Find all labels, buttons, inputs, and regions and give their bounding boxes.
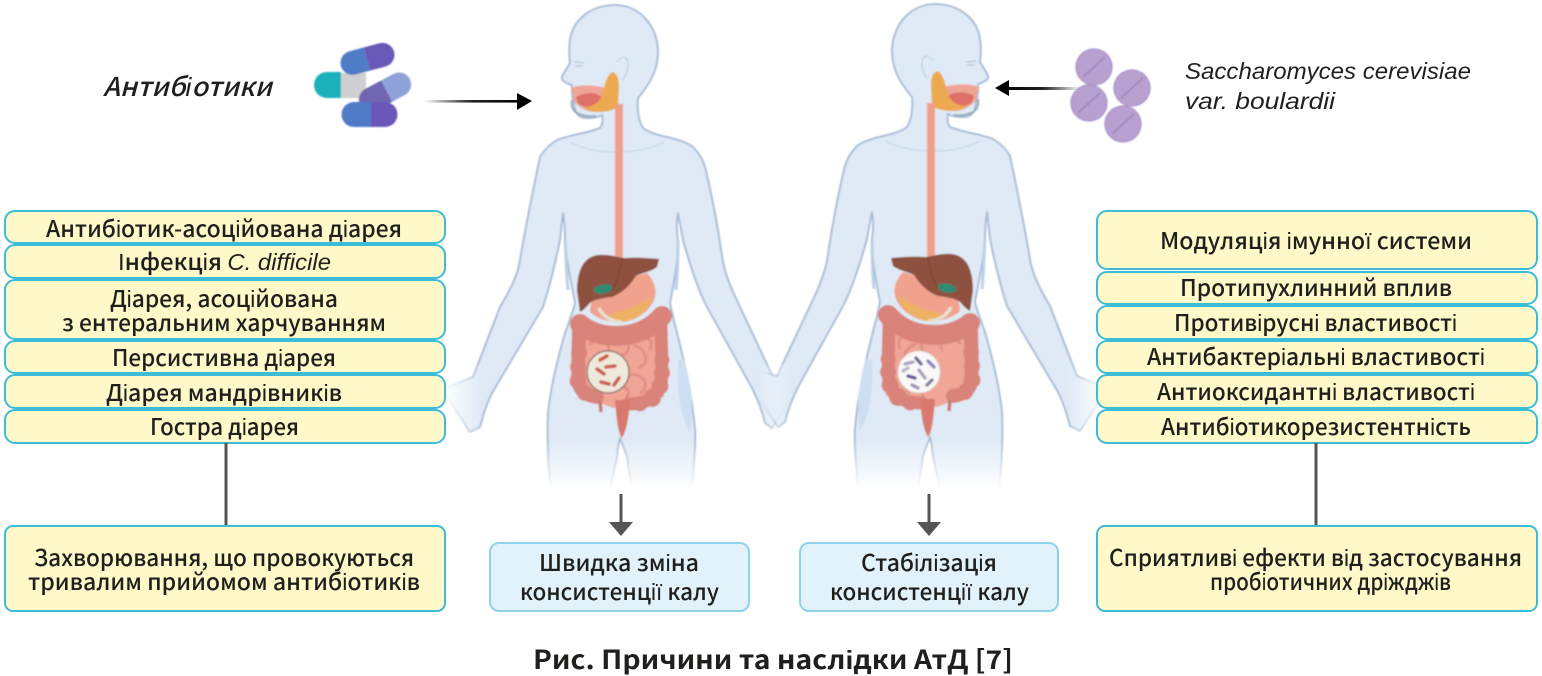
label: probiotic yeast name: var. boulardii	[1185, 88, 1336, 114]
item: immune modulation: Модуляція імунної системи	[1160, 222, 1472, 256]
connector: left list to summary	[224, 443, 228, 526]
label: antibiotics: Антибіотики	[103, 67, 274, 104]
icon: yeast tablets	[1071, 49, 1150, 142]
item: travellers' diarrhoea: Діарея мандрівників	[106, 374, 342, 408]
body figure: left person	[444, 5, 796, 490]
item: antiviral properties	[1097, 304, 1537, 339]
item: antioxidant properties: Антиоксидантні властивості	[1157, 373, 1475, 407]
item: persistent diarrhoea: Персистивна діарея	[112, 339, 336, 373]
item: antitumour effect	[1097, 269, 1537, 304]
arrow: left body down	[609, 494, 633, 536]
panel: conditions list	[5, 210, 445, 443]
summary box: left	[5, 526, 445, 611]
item: C. difficile infection: Інфекція C. difficile	[118, 243, 331, 277]
middle capsule	[355, 68, 415, 116]
summary box: left: тривалим прийомом антибіотиків	[28, 563, 420, 597]
item: antibiotic resistance: Антибіотикорезистентність	[1161, 408, 1471, 442]
item: travellers' diarrhoea	[5, 374, 445, 408]
label: probiotic yeast name	[1185, 58, 1471, 114]
item: enteral feeding diarrhoea: з ентеральним харчуванням	[62, 304, 386, 338]
item: antibiotic-associated diarrhoea: Антибіотик-асоційована діарея	[46, 210, 402, 244]
summary box: right: пробіотичних дріжджів	[1210, 563, 1451, 597]
outcome box: stabilisation	[800, 543, 1058, 611]
arrow: right body down	[917, 494, 941, 536]
item: enteral feeding diarrhoea: Діарея, асоційована	[110, 280, 338, 314]
item: immune modulation	[1097, 211, 1537, 269]
item: acute diarrhoea	[5, 408, 445, 443]
panel: probiotic effects list	[1097, 211, 1537, 443]
item: enteral feeding diarrhoea	[5, 280, 445, 339]
icon: antibiotic capsules	[314, 40, 415, 127]
summary box: right: Сприятливі ефекти від застосування	[1109, 539, 1522, 573]
teal capsule	[314, 72, 366, 98]
item: persistent diarrhoea	[5, 339, 445, 373]
top capsule	[338, 40, 397, 78]
item: antiviral properties: Противірусні властивості	[1174, 304, 1457, 338]
label: probiotic yeast name: Saccharomyces cerevisiae	[1185, 58, 1471, 84]
arrow: yeast to mouth	[995, 80, 1080, 96]
outcome box: stabilisation: консистенції калу	[830, 573, 1029, 607]
connector: right list to summary	[1314, 443, 1318, 526]
body figure: right person	[754, 4, 1106, 489]
item: antibiotic resistance	[1097, 408, 1537, 443]
gut microbiota disrupted: left circle	[587, 351, 629, 393]
item: acute diarrhoea: Гостра діарея	[150, 408, 299, 442]
arrow: antibiotics to mouth	[425, 93, 532, 110]
summary box: left: Захворювання, що провокуються	[34, 539, 414, 573]
bottom capsule	[342, 102, 398, 127]
item: antitumour effect: Протипухлинний вплив	[1180, 269, 1452, 303]
gut microbiota stabilised: right circle	[898, 351, 940, 393]
caption: Рис. Причини та наслідки АтД [7]	[533, 640, 1013, 676]
outcome box: rapid change: Швидка зміна	[539, 544, 699, 578]
outcome box: rapid change: консистенції калу	[520, 573, 719, 607]
item: C. difficile infection	[5, 243, 445, 278]
item: antibacterial properties: Антибактеріальні властивості	[1147, 338, 1485, 372]
outcome box: stabilisation: Стабілізація	[861, 544, 997, 578]
summary box: right	[1097, 526, 1537, 611]
outcome box: rapid change	[490, 543, 749, 611]
